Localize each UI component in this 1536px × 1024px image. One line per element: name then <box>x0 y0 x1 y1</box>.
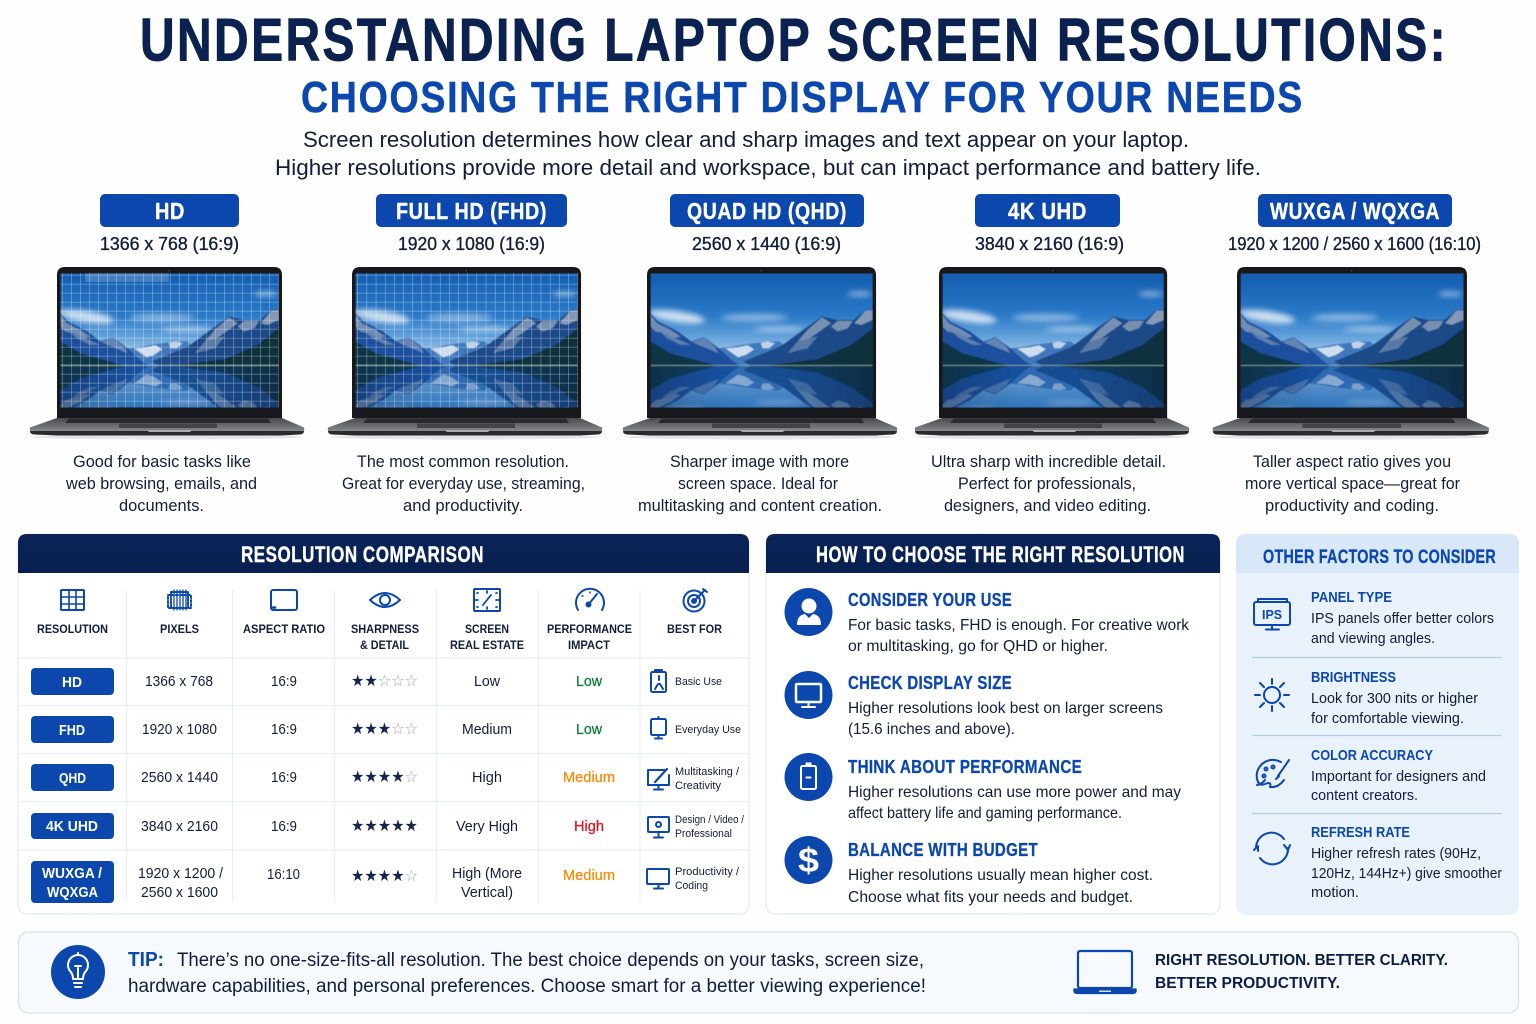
row: QHD: 2560 x 1440 <box>141 770 218 786</box>
row: WUXGA / WQXGA: 2560 x 1600 <box>141 885 218 901</box>
row: 4K UHD: 4K UHD <box>46 819 98 835</box>
row: 4K UHD: Professional <box>675 828 732 840</box>
column header: pixels <box>160 590 199 636</box>
step: think about performance: affect battery life and gaming performance. <box>848 805 1122 822</box>
description: 4K UHD: Perfect for professionals, <box>958 475 1136 493</box>
factor: brightness <box>1255 669 1478 727</box>
slogan <box>1155 952 1448 992</box>
spec: Quad HD: 2560 x 1440 (16:9) <box>692 234 841 254</box>
step: consider your use: or multitasking, go for QHD or higher. <box>848 638 1108 655</box>
column header: pixels: PIXELS <box>160 622 199 636</box>
factor: brightness: BRIGHTNESS <box>1311 669 1396 686</box>
subtitle: CHOOSING THE RIGHT DISPLAY FOR YOUR NEEDS <box>301 73 1304 122</box>
factor: panel type: IPS panels offer better colors <box>1311 611 1494 627</box>
column header: screen real estate: REAL ESTATE <box>450 638 524 652</box>
factor: panel type: IPS <box>1262 607 1282 622</box>
row: QHD: QHD <box>59 771 86 787</box>
badge: HD <box>100 194 239 227</box>
factor: refresh rate: Higher refresh rates (90Hz, <box>1311 846 1481 862</box>
column header: performance impact: PERFORMANCE <box>547 622 632 636</box>
spec: Full HD: 1920 x 1080 (16:9) <box>398 234 545 254</box>
row: WUXGA / WQXGA: 1920 x 1200 / <box>138 866 224 882</box>
panel: 4K UHD resolution card <box>915 194 1189 515</box>
row: QHD: High <box>472 770 502 786</box>
step: check display size <box>784 671 1163 738</box>
heading: how to choose <box>766 534 1220 573</box>
badge: 4K UHD <box>975 194 1120 227</box>
description: WUXGA: productivity and coding. <box>1265 497 1439 515</box>
row: HD: 1366 x 768 <box>145 674 213 690</box>
row: HD: ★★☆☆☆ <box>351 671 418 690</box>
description: HD: web browsing, emails, and <box>65 475 257 493</box>
description: HD: documents. <box>119 497 204 515</box>
row: WUXGA / WQXGA <box>31 861 740 903</box>
description: Quad HD <box>638 453 882 515</box>
laptop: Full HD <box>328 267 602 459</box>
column header: screen real estate: SCREEN <box>465 622 509 636</box>
row: HD: 16:9 <box>271 674 297 690</box>
icon: light bulb <box>51 945 105 999</box>
panel: HD resolution card <box>30 194 304 515</box>
description: WUXGA: more vertical space—great for <box>1245 475 1460 493</box>
badge: Quad HD <box>670 194 864 227</box>
column header: performance impact <box>547 589 632 652</box>
laptop: HD <box>30 267 304 459</box>
step: check display size: CHECK DISPLAY SIZE <box>848 673 1012 693</box>
description: Quad HD: multitasking and content creation. <box>638 497 882 515</box>
spec: WUXGA: 1920 x 1200 / 2560 x 1600 (16:10) <box>1228 234 1481 254</box>
step: check display size: (15.6 inches and above). <box>848 721 1015 738</box>
row: WUXGA / WQXGA: Medium <box>563 868 615 884</box>
row: FHD <box>31 716 741 743</box>
step: consider your use: CONSIDER YOUR USE <box>848 590 1012 610</box>
row: QHD: Multitasking / <box>675 766 740 778</box>
tip text <box>128 948 926 997</box>
row: FHD: Medium <box>462 722 512 738</box>
panel: WUXGA resolution card <box>1213 194 1489 515</box>
step: balance with budget: $ <box>798 842 819 880</box>
column header: resolution: RESOLUTION <box>37 622 108 636</box>
factor: refresh rate <box>1254 824 1502 901</box>
column header: resolution <box>37 590 108 636</box>
row: WUXGA / WQXGA: ★★★★☆ <box>351 866 418 885</box>
description: Quad HD: screen space. Ideal for <box>678 475 838 493</box>
row: FHD: Low <box>576 722 603 738</box>
row: HD: Low <box>474 674 501 690</box>
factor: refresh rate: motion. <box>1311 885 1359 901</box>
row: QHD: Creativity <box>675 780 722 792</box>
badge: Full HD <box>376 194 567 227</box>
description: Full HD <box>342 453 585 515</box>
step: think about performance <box>784 753 1181 822</box>
factor: color accuracy <box>1257 747 1486 804</box>
description: HD <box>65 453 257 515</box>
row: 4K UHD <box>31 813 745 840</box>
row: WUXGA / WQXGA: Vertical) <box>461 885 513 901</box>
laptop: Quad HD <box>623 267 897 459</box>
column header: sharpness and detail <box>351 593 419 652</box>
row: HD <box>31 668 722 695</box>
slogan: BETTER PRODUCTIVITY. <box>1155 975 1340 992</box>
laptop: 4K UHD <box>915 267 1189 459</box>
column header: best for: BEST FOR <box>667 622 722 636</box>
panel: resolution comparison table <box>18 534 749 914</box>
row: QHD: 16:9 <box>271 770 297 786</box>
column header: performance impact: IMPACT <box>568 638 611 652</box>
row: WUXGA / WQXGA: Productivity / <box>675 866 740 878</box>
step: check display size: Higher resolutions look best on larger screens <box>848 700 1163 717</box>
slogan: RIGHT RESOLUTION. BETTER CLARITY. <box>1155 952 1448 969</box>
factor: panel type: PANEL TYPE <box>1311 589 1392 606</box>
badge: HD: HD <box>155 198 185 224</box>
factor: color accuracy: content creators. <box>1311 788 1418 804</box>
factor: refresh rate: REFRESH RATE <box>1311 824 1410 841</box>
panel: Quad HD resolution card <box>623 194 897 515</box>
row: FHD: ★★★☆☆ <box>351 719 418 738</box>
panel: other factors to consider <box>1236 534 1519 915</box>
factor: brightness: for comfortable viewing. <box>1311 711 1464 727</box>
heading: other factors <box>1236 534 1519 573</box>
row: WUXGA / WQXGA: High (More <box>452 866 522 882</box>
spec: HD: 1366 x 768 (16:9) <box>100 234 239 254</box>
row: WUXGA / WQXGA: Coding <box>675 880 708 892</box>
row: FHD: Everyday Use <box>675 724 741 736</box>
row: FHD: FHD <box>59 723 85 739</box>
column header: sharpness and detail: & DETAIL <box>360 638 409 652</box>
tip text: hardware capabilities, and personal preferences. Choose smart for a better viewing experience! <box>128 976 926 997</box>
description: WUXGA: Taller aspect ratio gives you <box>1253 453 1451 471</box>
row: FHD: 1920 x 1080 <box>142 722 217 738</box>
row: WUXGA / WQXGA: 16:10 <box>267 867 300 883</box>
row: QHD: ★★★★☆ <box>351 767 418 786</box>
row: WUXGA / WQXGA: WQXGA <box>47 885 98 901</box>
step: consider your use <box>784 588 1190 655</box>
factor: panel type: and viewing angles. <box>1311 631 1435 647</box>
column header: screen real estate <box>450 589 524 652</box>
badge: Full HD: FULL HD (FHD) <box>396 198 547 224</box>
panel: how to choose the right resolution <box>766 534 1220 914</box>
intro text: Higher resolutions provide more detail and workspace, but can impact performance and battery life. <box>275 155 1261 180</box>
icon: laptop <box>1074 951 1136 994</box>
step: balance with budget <box>784 836 1153 906</box>
tip text: TIP: <box>128 948 164 971</box>
row: QHD: Medium <box>563 770 615 786</box>
factor: color accuracy: Important for designers and <box>1311 769 1486 785</box>
row: HD: HD <box>62 675 82 691</box>
factor: brightness: Look for 300 nits or higher <box>1311 691 1478 707</box>
description: Quad HD: Sharper image with more <box>670 453 849 471</box>
column header: aspect ratio <box>243 590 325 636</box>
row: 4K UHD: ★★★★★ <box>351 816 418 835</box>
description: WUXGA <box>1245 453 1460 515</box>
row: WUXGA / WQXGA: WUXGA / <box>42 866 102 882</box>
row: FHD: 16:9 <box>271 722 297 738</box>
step: balance with budget: Higher resolutions usually mean higher cost. <box>848 867 1153 884</box>
table heading <box>18 534 749 573</box>
description: 4K UHD: designers, and video editing. <box>944 497 1151 515</box>
column header: best for <box>667 589 722 636</box>
description: 4K UHD <box>931 453 1166 515</box>
badge: WUXGA: WUXGA / WQXGA <box>1270 198 1440 224</box>
step: balance with budget: Choose what fits your needs and budget. <box>848 889 1133 906</box>
factor: refresh rate: 120Hz, 144Hz+) give smoother <box>1311 866 1502 882</box>
description: Full HD: Great for everyday use, streaming, <box>342 475 585 493</box>
badge: 4K UHD: 4K UHD <box>1008 198 1087 224</box>
heading: how to choose: HOW TO CHOOSE THE RIGHT RESOLUTION <box>816 542 1185 567</box>
intro text <box>275 127 1261 180</box>
row: 4K UHD: 3840 x 2160 <box>141 819 218 835</box>
factor: color accuracy: COLOR ACCURACY <box>1311 747 1433 764</box>
factor: panel type <box>1254 589 1494 647</box>
column header: aspect ratio: ASPECT RATIO <box>243 622 325 636</box>
spec: 4K UHD: 3840 x 2160 (16:9) <box>975 234 1124 254</box>
row: QHD <box>31 764 740 792</box>
description: HD: Good for basic tasks like <box>73 453 251 471</box>
row: HD: Basic Use <box>675 676 722 688</box>
row: 4K UHD: Very High <box>456 819 518 835</box>
row: 4K UHD: Design / Video / <box>675 814 745 826</box>
row: 4K UHD: 16:9 <box>271 819 297 835</box>
description: Full HD: and productivity. <box>403 497 523 515</box>
panel: Full HD resolution card <box>328 194 602 515</box>
badge: Quad HD: QUAD HD (QHD) <box>687 198 847 224</box>
description: Full HD: The most common resolution. <box>357 453 569 471</box>
step: balance with budget: BALANCE WITH BUDGET <box>848 840 1038 860</box>
row: HD: Low <box>576 674 603 690</box>
column header: sharpness and detail: SHARPNESS <box>351 622 419 636</box>
intro text: Screen resolution determines how clear and sharp images and text appear on your laptop. <box>303 127 1189 152</box>
tip text: There’s no one-size-fits-all resolution. The best choice depends on your tasks, screen size, <box>177 950 924 971</box>
panel: tip banner <box>18 932 1518 1013</box>
table heading: RESOLUTION COMPARISON <box>241 542 484 567</box>
badge: WUXGA <box>1258 194 1452 227</box>
step: think about performance: THINK ABOUT PERFORMANCE <box>848 757 1082 777</box>
step: think about performance: Higher resolutions can use more power and may <box>848 784 1181 801</box>
row: 4K UHD: High <box>574 819 604 835</box>
step: consider your use: For basic tasks, FHD is enough. For creative work <box>848 617 1190 634</box>
laptop: WUXGA <box>1213 267 1489 459</box>
description: 4K UHD: Ultra sharp with incredible detail. <box>931 453 1166 471</box>
